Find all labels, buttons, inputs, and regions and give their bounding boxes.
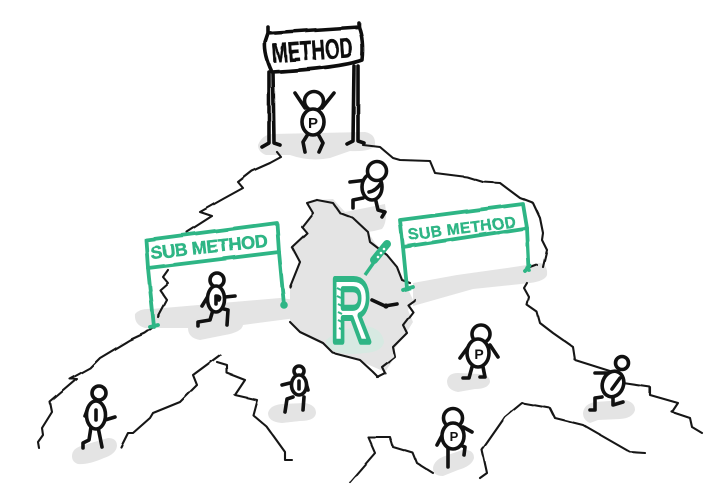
R character with wand [331, 244, 397, 361]
sub method sign left [146, 223, 288, 327]
figure: small middle person [282, 366, 308, 412]
figure: runner right [590, 356, 628, 410]
label: SUB METHOD [407, 214, 517, 244]
figure: bottom left person [83, 386, 115, 448]
figure: P person right: P [474, 346, 484, 362]
figure: P person right [460, 325, 498, 378]
R character with wand: R [331, 260, 371, 361]
figure: P person bottom: P [450, 429, 459, 444]
figure: person at top with arms raised: P [308, 115, 318, 132]
label: SUB METHOD [149, 231, 269, 263]
green tint under R [326, 326, 384, 354]
grey ground shadows [72, 132, 635, 476]
figure: P person bottom [437, 408, 472, 467]
figure: runner under left sub method [198, 273, 235, 326]
method label: METHOD [271, 32, 354, 69]
figure: runner near the top [350, 162, 386, 217]
figure: person at top with arms raised [295, 92, 334, 152]
method sign [262, 23, 364, 147]
mountain ridge lines [38, 145, 702, 482]
sub method sign right [400, 204, 530, 290]
